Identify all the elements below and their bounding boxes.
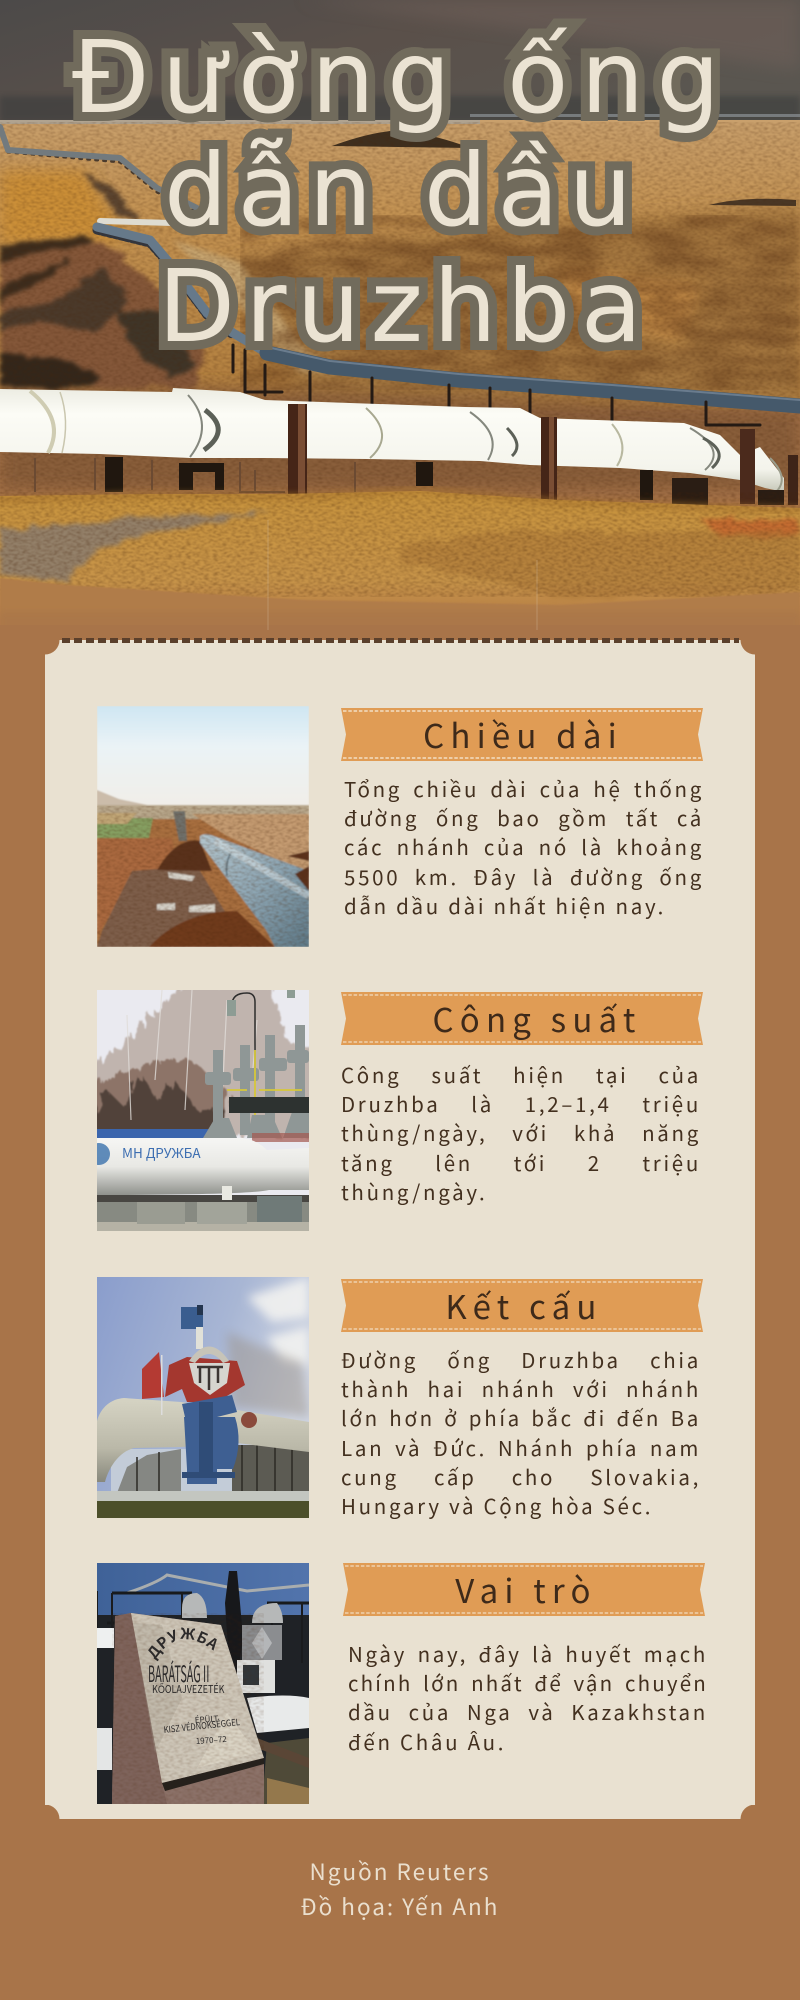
body text: Chiều dài: đường ống bao gồm tất cả [344, 802, 704, 832]
body text: Công suất: tăng lên tới 2 triệu [341, 1147, 701, 1177]
title: dẫn dầu [164, 132, 632, 249]
body text: Vai trò: đến Châu Âu. [348, 1726, 506, 1756]
body text: Vai trò [348, 1638, 708, 1756]
photo: memorial stone at pipeline station: ДРУЖБА [148, 1628, 217, 1662]
body text: Kết cấu: cung cấp cho Slovakia, [341, 1461, 701, 1491]
footer credits: Nguồn Reuters [310, 1855, 490, 1887]
body text: Chiều dài [344, 773, 704, 920]
title [64, 18, 720, 360]
title: Đường ống [72, 19, 720, 136]
photo: white tank with valves: МН ДРУЖБА [122, 1142, 201, 1162]
ribbon heading: Vai trò: Vai trò [455, 1565, 597, 1613]
body text: Công suất: thùng/ngày. [341, 1176, 487, 1206]
footer credits [301, 1855, 499, 1922]
dirt road [172, 240, 345, 372]
photo: memorial stone at pipeline station: KŐOLAJVEZETÉK [152, 1680, 225, 1696]
body text: Công suất: thùng/ngày, với khả năng [341, 1117, 701, 1147]
ribbon heading: Kết cấu: Kết cấu [445, 1281, 603, 1329]
ribbon heading: Vai trò [343, 1563, 705, 1616]
body text: Kết cấu: Đường ống Druzhba chia [341, 1344, 701, 1374]
foreground grass and dirt track [0, 491, 800, 640]
photo: white tank with valves [97, 990, 309, 1231]
section: Chiều dài [97, 706, 704, 947]
body text: Kết cấu: thành hai nhánh với nhánh [341, 1373, 701, 1403]
white foreground pipe [0, 388, 784, 492]
photo: pipeline in trench [97, 706, 309, 947]
body text: Chiều dài: các nhánh của nó là khoảng [344, 831, 704, 861]
photo: memorial stone at pipeline station: 1970–72 [195, 1734, 228, 1747]
body text: Công suất [341, 1059, 701, 1206]
body text: Chiều dài: Tổng chiều dài của hệ thống [344, 773, 704, 803]
body text: Kết cấu [341, 1344, 701, 1520]
body text: Chiều dài: dẫn dầu dài nhất hiện nay. [344, 890, 666, 920]
photo: valve with logo [97, 1277, 309, 1518]
section: Công suất [97, 990, 703, 1231]
body text: Vai trò: dầu của Nga và Kazakhstan [348, 1696, 708, 1726]
footer credits: Đồ họa: Yến Anh [301, 1890, 499, 1922]
body text: Kết cấu: lớn hơn ở phía bắc đi đến Ba [341, 1402, 701, 1432]
body text: Công suất: Druzhba là 1,2–1,4 triệu [341, 1088, 701, 1118]
body text: Vai trò: Ngày nay, đây là huyết mạch [348, 1638, 708, 1668]
ribbon heading: Kết cấu [341, 1279, 703, 1332]
hills [332, 130, 470, 148]
section: Vai trò [97, 1563, 708, 1804]
photo: memorial stone at pipeline station: BARÁTSÁG II [148, 1658, 209, 1690]
rust support posts [35, 404, 798, 508]
body text: Công suất: Công suất hiện tại của [341, 1059, 701, 1089]
ribbon heading: Chiều dài: Chiều dài [423, 710, 623, 758]
body text: Chiều dài: 5500 km. Đây là đường ống [344, 861, 704, 891]
ribbon heading: Công suất [341, 992, 703, 1045]
photo: memorial stone at pipeline station: KISZ VÉDNOKSÉGGEL [163, 1715, 241, 1736]
cream content panel with notched corners [45, 638, 755, 820]
section: Kết cấu [97, 1277, 703, 1520]
hero photo: oil pipeline across the steppe [0, 0, 800, 630]
photo: memorial stone at pipeline station: ÉPÜLT [194, 1713, 219, 1726]
body text: Kết cấu: Hungary và Cộng hòa Séc. [341, 1490, 653, 1520]
body text: Kết cấu: Lan và Đức. Nhánh phía nam [341, 1432, 701, 1462]
body text: Vai trò: chính lớn nhất để vận chuyển [348, 1667, 708, 1697]
photo: memorial stone at pipeline station [97, 1563, 309, 1804]
ribbon heading: Chiều dài [341, 708, 703, 761]
distant pipeline [0, 127, 800, 425]
texture [240, 215, 800, 390]
shadowed slope [0, 173, 205, 388]
ribbon heading: Công suất: Công suất [432, 994, 642, 1042]
